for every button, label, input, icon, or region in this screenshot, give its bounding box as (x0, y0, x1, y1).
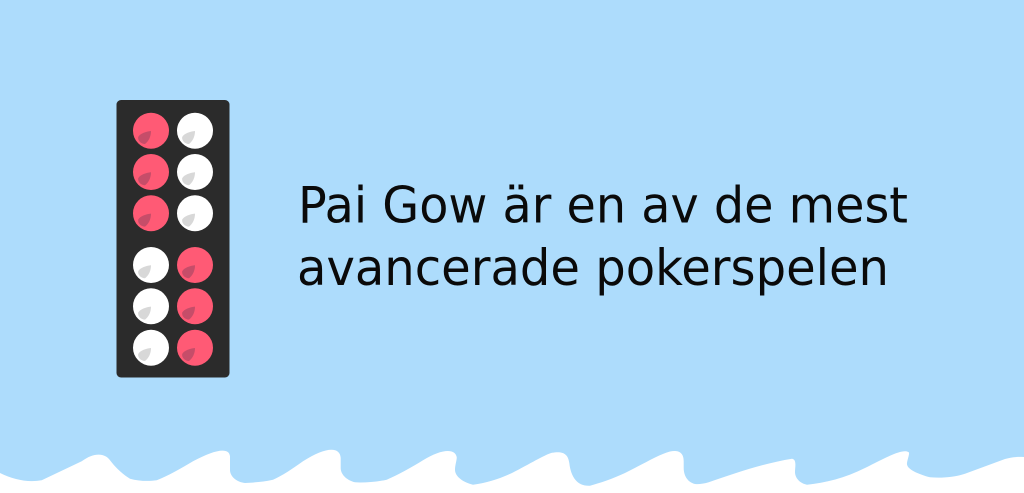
upper left red pips (133, 113, 169, 231)
lower right red pips (177, 247, 213, 366)
heading (297, 177, 908, 297)
heading line 2: avancerade pokerspelen (297, 239, 889, 297)
tile body (116, 100, 230, 378)
heading line 1: Pai Gow är en av de mest (298, 177, 908, 235)
lower left white pips (133, 247, 169, 366)
upper right white pips (177, 113, 213, 231)
domino tile (116, 100, 230, 378)
